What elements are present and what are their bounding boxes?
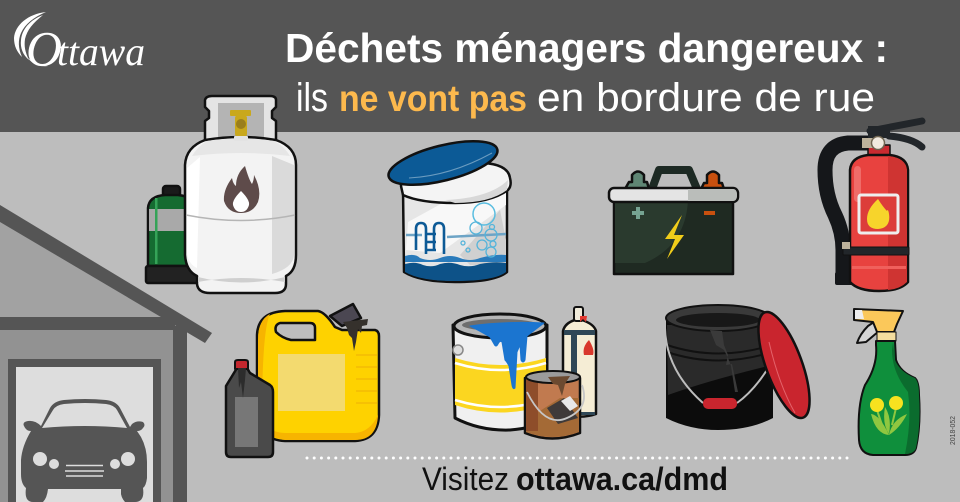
paint brush [547, 398, 578, 424]
battery minus sign [704, 211, 715, 215]
battery positive terminal [625, 172, 649, 189]
icon: oil bottle [226, 360, 273, 457]
logo wordmark [26, 20, 145, 76]
icon: paint can [453, 314, 547, 430]
battery lid [609, 188, 738, 202]
stain can body [525, 378, 580, 438]
water waves [405, 255, 506, 262]
tank body [185, 137, 296, 293]
jug shading [262, 415, 378, 440]
icon: weed killer spray bottle [854, 309, 920, 455]
green bottle body [859, 341, 920, 455]
stain handle [527, 385, 584, 420]
icon: fire extinguisher [825, 121, 922, 291]
bucket handle grip [703, 398, 737, 409]
title line 1: Déchets ménagers dangereux : [285, 25, 888, 71]
logo wordmark: ttawa [57, 29, 145, 74]
pool ladder [416, 223, 444, 254]
tank collar window [218, 103, 264, 139]
icon: small green gas canister [146, 186, 198, 283]
blue paint [470, 322, 544, 389]
battery handle [652, 170, 697, 189]
header band [0, 0, 960, 132]
bottle shade [892, 342, 920, 454]
extinguisher lower band [852, 266, 906, 269]
tank valve [230, 110, 251, 141]
garage gable [0, 212, 172, 317]
icon: paint spray can [563, 307, 596, 417]
icon: car battery [609, 170, 738, 274]
black bucket sheen [667, 325, 772, 395]
icon: propane tank [185, 96, 296, 293]
jug ribs [356, 355, 377, 403]
sprayer head [854, 309, 903, 332]
title line 2: ils: ils [296, 76, 328, 120]
battery negative terminal [701, 172, 724, 189]
extinguisher hose [825, 143, 868, 279]
garage wall [0, 330, 174, 502]
spray flame [584, 340, 594, 355]
lightning bolt [665, 215, 684, 259]
icon: wood stain can [525, 371, 584, 438]
oil drip [343, 319, 368, 351]
logo: Ottawa [14, 12, 145, 76]
paint yellow band [455, 358, 546, 412]
extinguisher body [850, 155, 908, 291]
spray can body [563, 320, 596, 417]
logo wordmark: O [26, 20, 62, 76]
bottle drip [238, 368, 246, 398]
sprayer nozzle [855, 310, 864, 319]
dotted divider [307, 456, 847, 460]
extinguisher strap [843, 247, 909, 255]
jug handle hole [276, 323, 315, 340]
stain wood label [526, 398, 579, 437]
garage door frame [8, 359, 161, 502]
tank collar [205, 96, 276, 142]
water line [406, 234, 506, 237]
icon: flame [224, 166, 259, 213]
paint can rim [454, 314, 546, 338]
icon: car [21, 399, 147, 502]
tank shading [272, 156, 294, 274]
title line 2: en bordure de rue: en bordure de rue [537, 76, 875, 120]
paint can handle lug [453, 345, 463, 355]
jug body [257, 311, 379, 441]
garage roof [0, 205, 212, 343]
icon: black paint bucket [665, 305, 820, 430]
bucket lid [384, 132, 502, 194]
bucket body [403, 188, 507, 282]
stain drip [548, 376, 570, 396]
bottle label [235, 397, 258, 447]
jug label [278, 354, 345, 411]
battery body [614, 199, 733, 274]
bottle collar [877, 332, 896, 341]
icon: yellow fuel jug [257, 304, 379, 441]
black bucket drips [710, 330, 738, 392]
bottle cap [235, 360, 248, 369]
spray nozzle [574, 307, 583, 321]
title [285, 25, 888, 120]
extinguisher label [859, 195, 898, 233]
garage beam [0, 317, 175, 330]
bottle body [226, 368, 273, 457]
battery plus sign [632, 207, 644, 219]
stain can rim [526, 371, 580, 383]
reference code: 2018-052 [948, 416, 957, 445]
title line 2: ne vont pas: ne vont pas [339, 78, 527, 119]
garage illustration [0, 205, 212, 502]
paint can body [453, 325, 547, 430]
black bucket body [666, 318, 773, 430]
battery highlight [615, 200, 688, 263]
garage door [16, 367, 153, 502]
paint white stripes [455, 363, 546, 407]
bucket handle [665, 328, 770, 403]
website address: ottawa.ca/dmd [516, 461, 728, 497]
extinguisher gauge [862, 138, 874, 148]
visit label: Visitez [422, 461, 509, 497]
bubbles [461, 203, 497, 257]
garage post [173, 326, 187, 502]
jug cap [330, 304, 361, 326]
extinguisher shade [888, 156, 907, 290]
bucket rim [401, 163, 511, 203]
spray bands [564, 330, 595, 335]
trigger [857, 322, 879, 343]
black bucket rim [666, 305, 770, 331]
pool water bottom [405, 262, 506, 281]
bucket red lid [748, 306, 820, 424]
call to action [422, 461, 728, 497]
extinguisher handle [870, 121, 922, 147]
bucket shade [406, 188, 506, 253]
icon: dandelions [870, 396, 907, 435]
logo swirl [14, 12, 48, 66]
extinguisher neck [868, 145, 890, 157]
icon: pool chlorine bucket [384, 132, 511, 282]
